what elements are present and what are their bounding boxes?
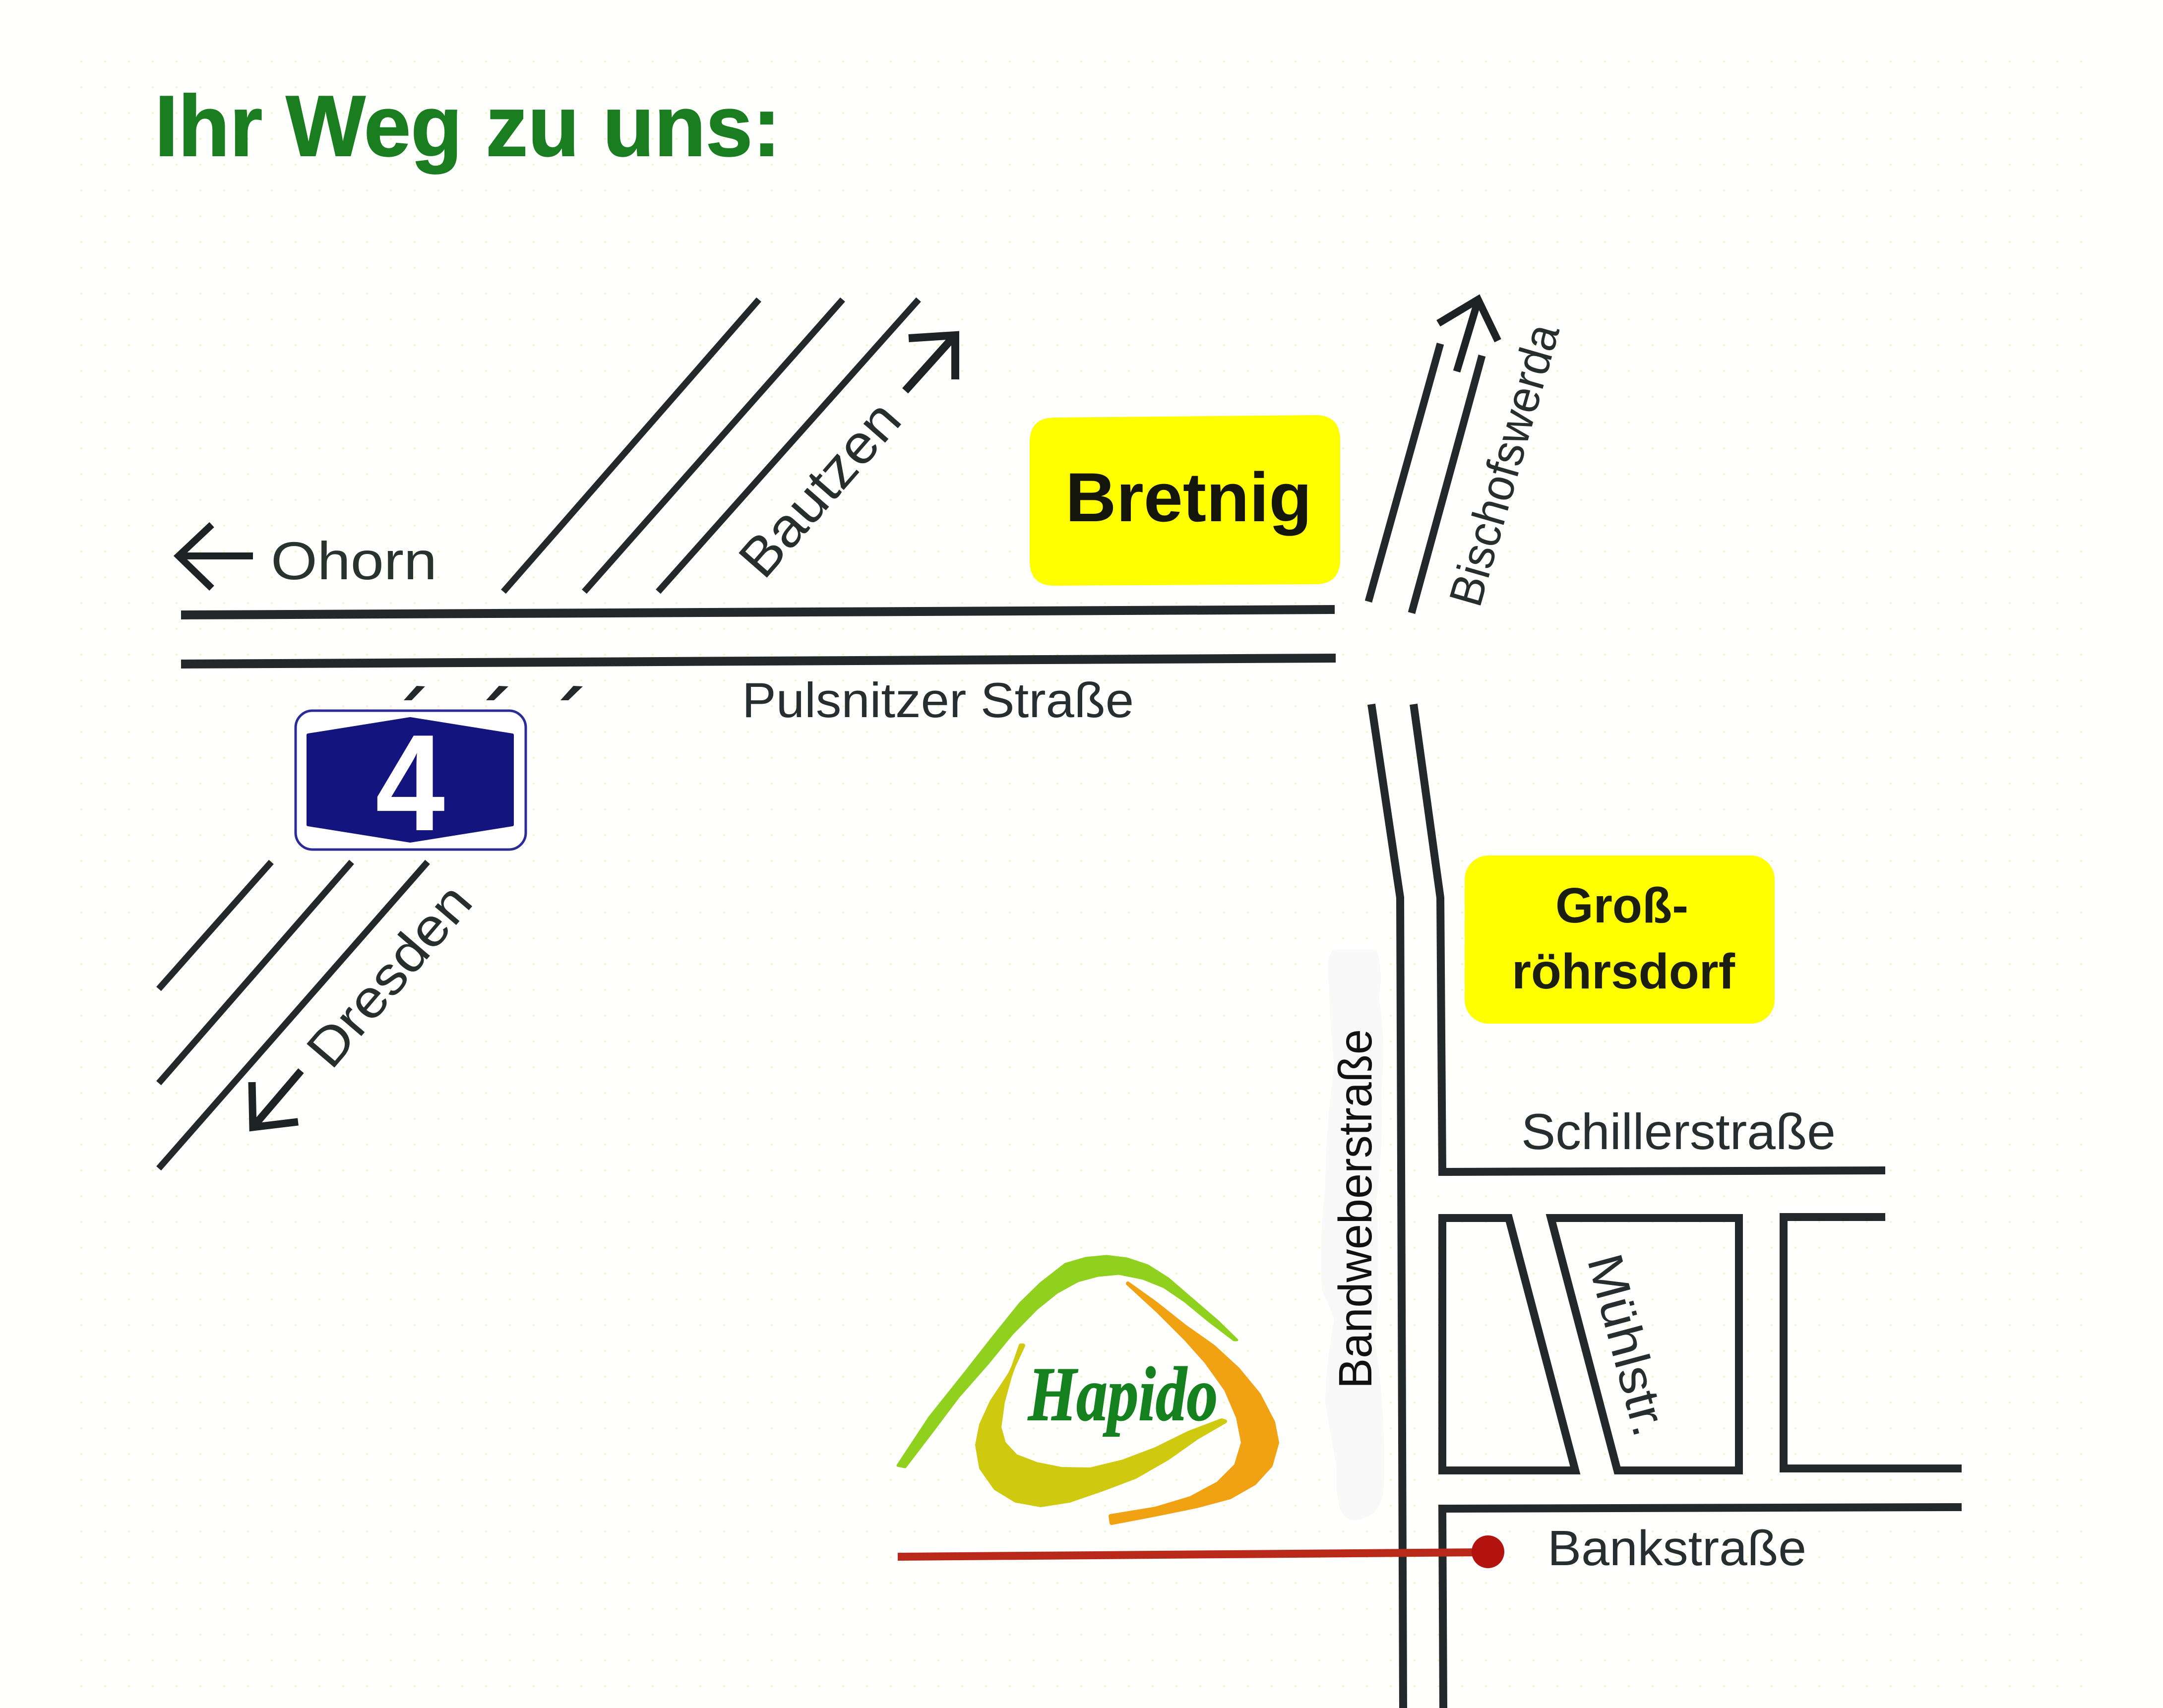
block: right — [1784, 1217, 1962, 1468]
arrow: Bautzen — [905, 335, 955, 391]
arrow: Dresden — [252, 1071, 301, 1127]
arrow: Bischofswerda — [1438, 300, 1498, 371]
label: Bankstraße: Bankstraße — [1547, 1521, 1806, 1576]
road: Bandweberstraße west side — [1371, 704, 1403, 1708]
route line to destination — [898, 1535, 1504, 1568]
road: Bandweberstraße east side and Schillerstraße — [1414, 704, 1885, 1172]
road: Pulsnitzer Straße — [181, 610, 1336, 664]
label: Pulsnitzer Straße: Pulsnitzer Straße — [742, 672, 1134, 728]
motorway bridge dashes — [404, 686, 583, 700]
label: Mühlstr.: Mühlstr. — [1577, 1248, 1678, 1442]
place box: Großröhrsdorf — [1465, 855, 1775, 1024]
label: Bischofswerda: Bischofswerda — [1439, 318, 1569, 612]
label: Bautzen: Bautzen — [727, 389, 913, 589]
label: Ohorn: Ohorn — [271, 531, 437, 591]
logo swoosh: green — [898, 1256, 1237, 1467]
icon: motorway sign A4 — [296, 706, 526, 859]
block: left — [1442, 1218, 1575, 1470]
road: motorway towards Bautzen — [503, 300, 919, 592]
icon: motorway sign A4: 4 — [375, 706, 446, 859]
place box: Bretnig — [1030, 415, 1340, 586]
place box: Großröhrsdorf: Groß- — [1555, 878, 1688, 933]
background blotch behind street label — [1321, 949, 1384, 1520]
label: Dresden: Dresden — [295, 872, 483, 1079]
logo: Hapido — [898, 1256, 1277, 1523]
title: Ihr Weg zu uns: — [155, 77, 781, 174]
logo swoosh: orange — [1111, 1283, 1277, 1523]
road: motorway towards Dresden — [159, 862, 428, 1168]
place box: Bretnig: Bretnig — [1065, 458, 1312, 536]
road: Bankstraße — [1442, 1507, 1962, 1708]
block: middle — [1551, 1218, 1739, 1470]
label: Bandweberstraße: Bandweberstraße — [1329, 1029, 1382, 1389]
logo wordmark: Hapido — [1027, 1351, 1218, 1437]
place box: Großröhrsdorf: röhrsdorf — [1512, 944, 1735, 999]
arrow: Ohorn — [179, 525, 253, 588]
logo swoosh: olive — [977, 1345, 1225, 1505]
label: Schillerstraße: Schillerstraße — [1521, 1103, 1836, 1160]
road: towards Bischofswerda — [1368, 344, 1482, 613]
